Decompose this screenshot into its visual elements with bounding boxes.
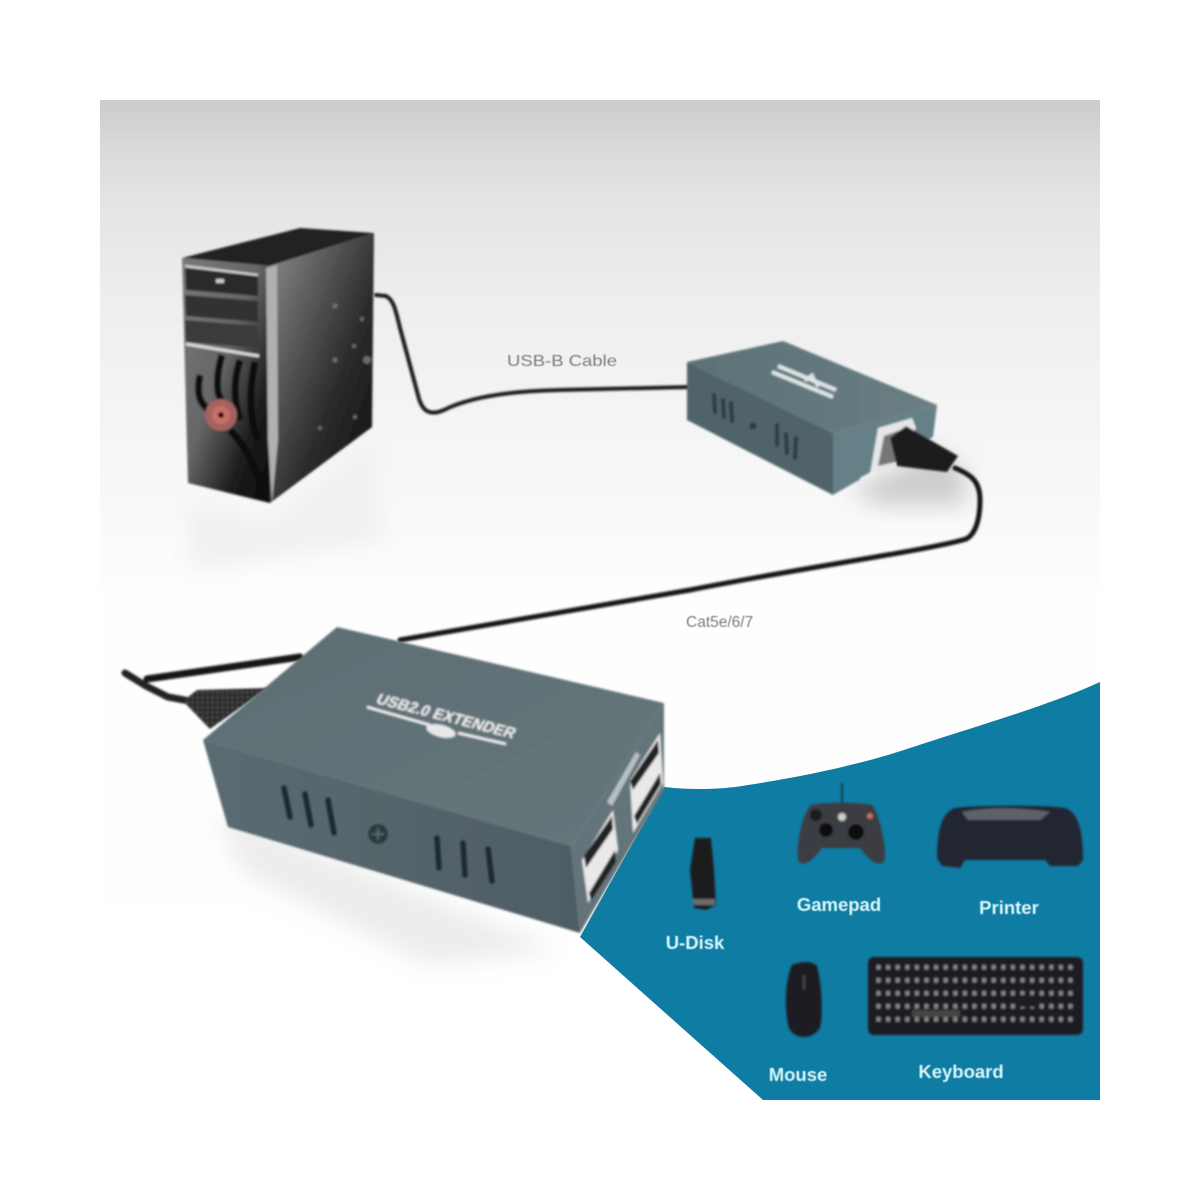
silver strip [607,752,640,806]
label: Cat5e/6/7: Cat5e/6/7 [686,614,753,631]
icon: gamepad [798,783,885,864]
large box top face [203,627,664,846]
RJ45 plug [890,426,958,472]
small box right face [833,405,937,495]
USB ports upper pair [630,733,663,833]
blue device panel [580,682,1100,1100]
small box vents [714,395,796,458]
icon: printer [937,806,1083,868]
large USB2.0 extender box [203,627,664,933]
tower PC [182,228,374,503]
background panel [100,100,1100,1100]
label: Mouse: Mouse [769,1064,827,1085]
large box front face [203,740,580,933]
tower silver corner edge [266,265,278,503]
icon: mouse [786,962,822,1037]
small box logo [772,366,836,397]
USB-B cable [376,295,690,413]
Cat5e cable [400,468,980,640]
icon: keyboard [868,957,1083,1035]
icon: U-Disk [690,838,716,910]
tower top face [182,228,374,266]
floor reflection below tower [190,440,385,570]
label: U-Disk: U-Disk [666,932,725,953]
tower drive bays [185,266,259,356]
large box screw [368,824,388,844]
label: USB-B Cable: USB-B Cable [507,353,617,370]
device icons [666,783,1083,1085]
RJ45 port [870,418,916,474]
tower side vents [318,304,371,430]
large device shadow [215,810,560,965]
small box front face [687,362,833,495]
USB ports lower pair [582,810,618,903]
tower side face [270,233,374,503]
small device shadow [850,450,965,505]
small box top face [687,341,937,433]
small extender box [687,341,958,495]
large box right face [571,703,664,933]
label: Gamepad: Gamepad [797,894,881,915]
tower front face [182,258,270,503]
rear cables and connector [125,657,300,729]
large box logo: USB2.0 EXTENDER [373,691,519,742]
tower decorative fan swirl [198,355,262,490]
large box vents right [437,838,492,881]
large box vents left [284,788,334,833]
small box screw [750,422,756,430]
label: Keyboard: Keyboard [918,1061,1004,1082]
label: Printer: Printer [979,897,1039,918]
